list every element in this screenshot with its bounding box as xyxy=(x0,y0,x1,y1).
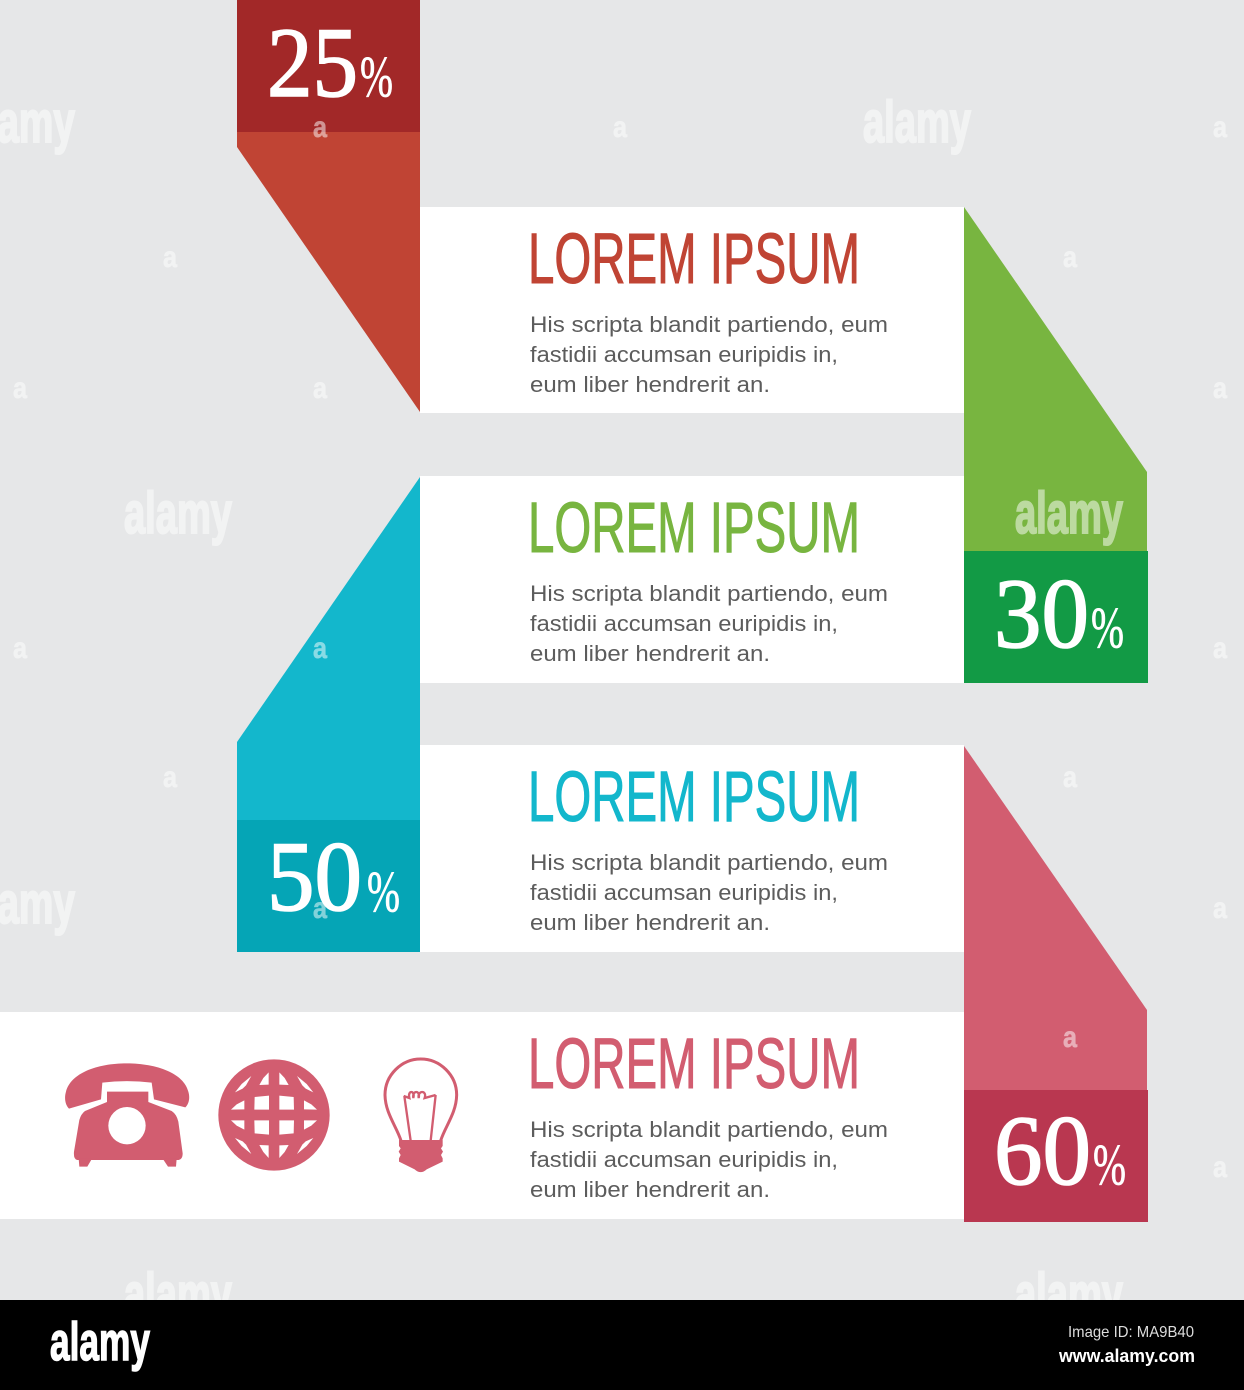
watermarks: a xyxy=(163,761,177,794)
green ribbon with 30%: % xyxy=(1091,595,1124,660)
text block 4: His scripta blandit partiendo, eum xyxy=(530,1117,888,1142)
text block 1 xyxy=(528,220,888,397)
red ribbon with 25% xyxy=(237,0,420,412)
image id: Image ID: MA9B40 xyxy=(1068,1324,1194,1341)
text block 4 xyxy=(528,1025,888,1202)
text block 1: His scripta blandit partiendo, eum xyxy=(530,312,888,337)
white banner 2 xyxy=(420,476,964,683)
text block 3: fastidii accumsan euripidis in, xyxy=(530,880,838,905)
footer logo: alamy xyxy=(50,1312,150,1372)
pink ribbon with 60%: 60 xyxy=(994,1095,1091,1206)
blue ribbon with 50%: % xyxy=(367,859,400,924)
watermarks: a xyxy=(1213,632,1227,665)
text block 1: eum liber hendrerit an. xyxy=(530,372,770,397)
watermarks: a xyxy=(313,372,327,405)
text block 4: fastidii accumsan euripidis in, xyxy=(530,1147,838,1172)
text block 2: LOREM IPSUM xyxy=(528,489,860,568)
text block 2: His scripta blandit partiendo, eum xyxy=(530,581,888,606)
green ribbon with 30% xyxy=(964,207,1148,683)
white banner 1 xyxy=(420,207,964,413)
pink ribbon with 60%: % xyxy=(1093,1132,1126,1197)
text block 1: fastidii accumsan euripidis in, xyxy=(530,342,838,367)
watermarks: a xyxy=(1213,111,1227,144)
text block 4: LOREM IPSUM xyxy=(528,1025,860,1104)
text block 2 xyxy=(528,489,888,666)
blue ribbon with 50%: 50 xyxy=(267,821,362,932)
watermarks: a xyxy=(1213,1151,1227,1184)
text block 2: eum liber hendrerit an. xyxy=(530,641,770,666)
watermarks: a xyxy=(1213,892,1227,925)
watermarks: a xyxy=(313,111,327,144)
watermarks: a xyxy=(1063,1021,1077,1054)
watermarks: a xyxy=(313,632,327,665)
watermarks: a xyxy=(1063,761,1077,794)
icon: light bulb xyxy=(385,1059,457,1172)
icon: telephone xyxy=(65,1063,189,1167)
watermarks: a xyxy=(163,241,177,274)
red ribbon with 25%: 25 xyxy=(267,7,358,118)
green ribbon with 30%: 30 xyxy=(994,558,1089,669)
text block 1: LOREM IPSUM xyxy=(528,220,860,299)
watermarks: a xyxy=(13,632,27,665)
watermarks: alamy xyxy=(1015,1262,1123,1327)
text block 4: eum liber hendrerit an. xyxy=(530,1177,770,1202)
footer bar xyxy=(0,1300,1244,1390)
icon: globe xyxy=(218,1059,330,1171)
watermarks: alamy xyxy=(124,481,232,546)
pink ribbon with 60% xyxy=(964,746,1148,1222)
text block 3 xyxy=(528,758,888,935)
text block 3: LOREM IPSUM xyxy=(528,758,860,837)
watermarks: a xyxy=(613,111,627,144)
website: www.alamy.com xyxy=(1058,1346,1195,1366)
text block 2: fastidii accumsan euripidis in, xyxy=(530,611,838,636)
watermarks: alamy xyxy=(863,90,971,155)
white banner 3 xyxy=(420,745,964,952)
watermarks: alamy xyxy=(1015,481,1123,546)
watermarks: a xyxy=(1063,241,1077,274)
watermarks: a xyxy=(1213,372,1227,405)
watermarks: a xyxy=(313,892,327,925)
watermarks: alamy xyxy=(124,1262,232,1327)
watermarks: a xyxy=(13,372,27,405)
red ribbon with 25%: % xyxy=(360,44,393,109)
text block 3: eum liber hendrerit an. xyxy=(530,910,770,935)
white banner 4 xyxy=(0,1012,964,1219)
blue ribbon with 50% xyxy=(237,477,420,952)
text block 3: His scripta blandit partiendo, eum xyxy=(530,850,888,875)
